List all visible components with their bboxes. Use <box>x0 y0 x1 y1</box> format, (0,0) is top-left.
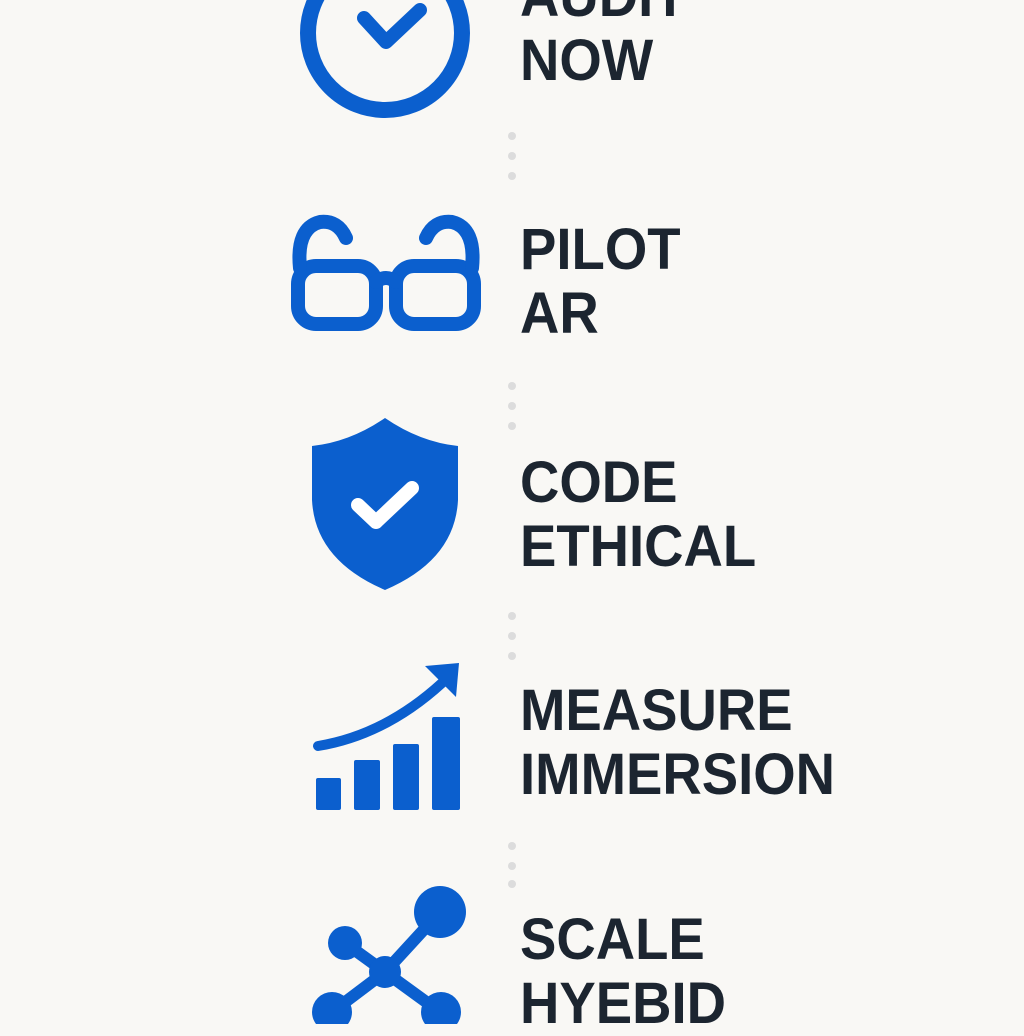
text: step 5 <box>520 907 726 1036</box>
text: step 2: PILOT <box>520 217 681 282</box>
text: step 2 <box>520 217 681 346</box>
connector dots <box>508 132 516 888</box>
text: step 1: NOW <box>520 28 653 93</box>
icon: network <box>312 886 466 1032</box>
text: step 3 <box>520 450 756 579</box>
text: step 4: IMMERSION <box>520 742 835 807</box>
icon: glasses <box>298 222 474 324</box>
icon: clock <box>308 0 462 110</box>
icon: shield <box>312 418 458 590</box>
text: step 4 <box>520 678 835 807</box>
text: step 3: CODE <box>520 450 678 515</box>
text: step 5: SCALE <box>520 907 705 972</box>
icon: growth chart <box>316 663 460 810</box>
text: step 4: MEASURE <box>520 678 793 743</box>
text: step 2: AR <box>520 281 599 346</box>
text: step 1 <box>520 0 677 93</box>
text: step 3: ETHICAL <box>520 514 756 579</box>
text: step 5: HYEBID <box>520 971 726 1036</box>
